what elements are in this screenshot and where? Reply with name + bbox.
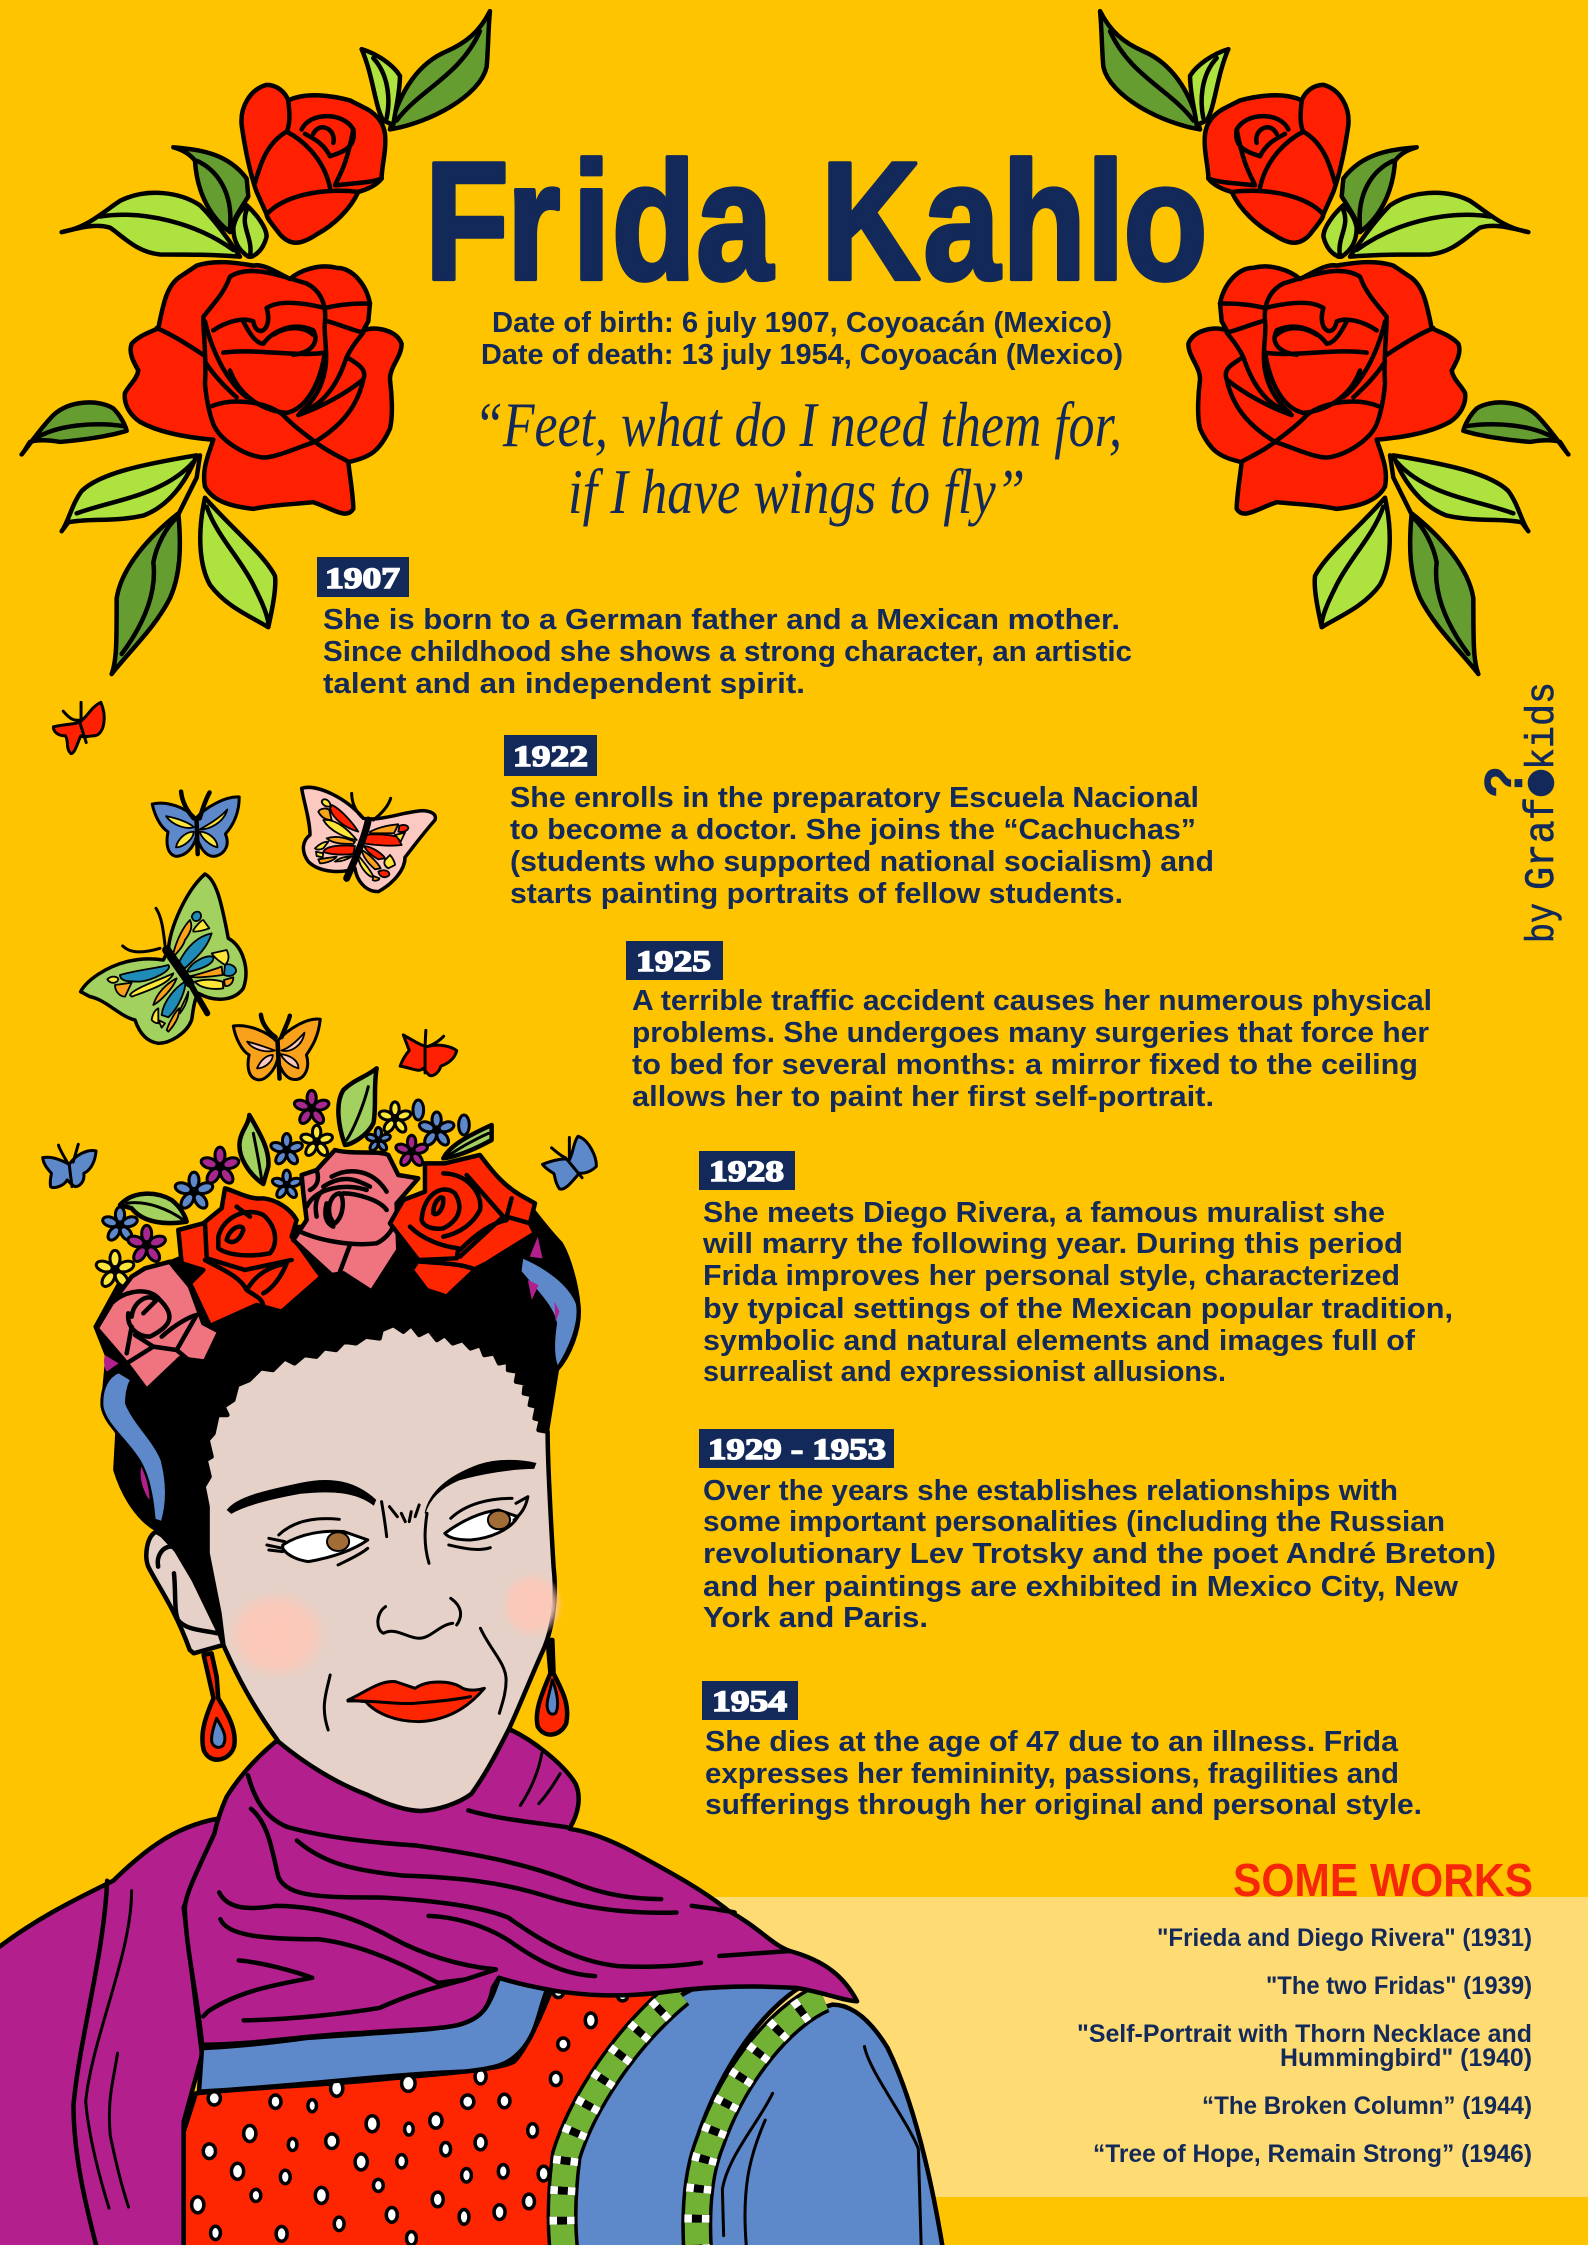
timeline: 1922: (students who supported national socialism) and — [510, 846, 1214, 878]
panel: some works background — [640, 1897, 1588, 2197]
timeline: 1928: 1928 — [709, 1155, 784, 1188]
timeline: 1925: problems. She undergoes many surgeries that force her — [632, 1017, 1429, 1049]
clothing — [0, 1730, 944, 2245]
timeline: 1907: She is born to a German father and a Mexican mother. — [323, 604, 1120, 636]
panel text: some works: "The two Fridas" (1939) — [1266, 1972, 1532, 2000]
blue sleeve — [698, 2005, 944, 2245]
timeline: 1925 — [626, 941, 1432, 1113]
blue collar — [199, 1978, 548, 2092]
timeline: 1929-1953: 1929 - 1953 — [708, 1433, 886, 1466]
small flowers — [95, 1090, 469, 1289]
dates: Date of death: 13 july 1954, Coyoacán (Mexico) — [481, 339, 1123, 371]
right eyebrow — [425, 1460, 536, 1513]
butterflies: small group — [43, 702, 596, 1189]
butterfly: blue — [152, 792, 239, 856]
rose: pink left — [97, 1262, 219, 1390]
right eye — [445, 1497, 528, 1549]
portrait of Frida — [0, 1068, 944, 2245]
quote: “Feet, what do I need them for, — [474, 389, 1122, 460]
timeline: 1925: A terrible traffic accident causes her numerous physical — [632, 985, 1432, 1017]
timeline: 1928: by typical settings of the Mexican popular tradition, — [703, 1293, 1453, 1325]
brow wrinkles and nose — [324, 1502, 506, 1730]
timeline: 1922: starts painting portraits of fellow students. — [510, 878, 1123, 910]
timeline: 1907: 1907 — [325, 562, 400, 595]
timeline: 1954: expresses her femininity, passions, fragilities and — [705, 1758, 1399, 1790]
timeline: 1928 — [699, 1151, 1453, 1388]
red blouse with dots — [184, 1988, 667, 2245]
magenta scarf — [185, 1730, 857, 2045]
butterfly: large green — [81, 874, 246, 1043]
small rose — [241, 85, 385, 243]
timeline: 1928: surrealist and expressionist allusions. — [703, 1356, 1226, 1388]
butterfly: pink — [302, 787, 435, 892]
panel text: some works: “Tree of Hope, Remain Strong” (1946) — [1093, 2140, 1532, 2168]
dates — [481, 307, 1123, 371]
timeline: 1922: to become a doctor. She joins the “Cachuchas” — [510, 814, 1196, 846]
left eyebrow — [227, 1480, 376, 1513]
timeline: 1929-1953: York and Paris. — [703, 1602, 928, 1634]
timeline: 1954: sufferings through her original and personal style. — [705, 1789, 1422, 1821]
timeline: 1929-1953: Over the years she establishes relationships with — [703, 1475, 1398, 1507]
quote: if I have wings to fly” — [568, 456, 1025, 527]
credit: by Grafokids: ? — [1474, 766, 1534, 798]
green braid: outer — [697, 1998, 823, 2245]
butterfly: small blue right — [542, 1136, 596, 1189]
timeline: 1907: Since childhood she shows a strong character, an artistic — [323, 636, 1132, 668]
credit: by Grafokids: kids — [1521, 682, 1566, 770]
leaf: long light — [62, 193, 267, 257]
leaf: upper left dark — [173, 147, 248, 232]
hair ribbon right — [520, 1237, 578, 1368]
leaf: bottom light — [200, 498, 275, 627]
timeline: 1929-1953: and her paintings are exhibited in Mexico City, New — [703, 1571, 1458, 1603]
hair ribbon left — [102, 1355, 167, 1523]
panel text: some works: "Self-Portrait with Thorn Necklace and — [1077, 2020, 1532, 2048]
leaf: bottom dark — [112, 455, 200, 674]
timeline: 1922: 1922 — [513, 740, 588, 773]
timeline: 1922 — [504, 735, 1214, 910]
timeline: 1907 — [317, 557, 1132, 700]
timeline: 1954 — [702, 1681, 1422, 1821]
timeline: 1929-1953 — [699, 1429, 1496, 1634]
leaf: lower left dark — [22, 402, 127, 454]
timeline: 1922: She enrolls in the preparatory Escuela Nacional — [510, 782, 1199, 814]
butterfly: red top left — [53, 702, 104, 754]
timeline: 1929-1953: revolutionary Lev Trotsky and the poet André Breton) — [703, 1538, 1496, 1570]
credit: by Grafokids — [1474, 682, 1566, 943]
earring right — [537, 1640, 567, 1735]
title: Frida Kahlo — [425, 127, 1208, 315]
panel text: some works — [1077, 1854, 1533, 2168]
timeline: 1928: symbolic and natural elements and images full of — [703, 1325, 1415, 1357]
timeline: 1928: Frida improves her personal style, characterized — [703, 1260, 1400, 1292]
panel text: some works: "Frieda and Diego Rivera" (1931) — [1157, 1924, 1532, 1952]
panel text: some works: “The Broken Column” (1944) — [1202, 2092, 1532, 2120]
large rose — [125, 262, 402, 514]
leaf: lower left light — [62, 455, 197, 531]
lips — [348, 1681, 484, 1722]
timeline: 1954: 1954 — [712, 1685, 787, 1718]
timeline: 1925: 1925 — [636, 945, 711, 978]
timeline: 1925: allows her to paint her first self-portrait. — [632, 1081, 1214, 1113]
rose: red right — [390, 1155, 535, 1297]
butterfly: red right — [400, 1030, 457, 1076]
ear — [146, 1532, 223, 1653]
dates: Date of birth: 6 july 1907, Coyoacán (Mexico) — [492, 307, 1112, 339]
rose: red left — [178, 1188, 322, 1326]
butterfly: small blue left — [43, 1144, 96, 1188]
crown leaves — [120, 1068, 492, 1223]
butterfly: orange — [233, 1015, 320, 1080]
timeline: 1929-1953: some important personalities (including the Russian — [703, 1506, 1445, 1538]
timeline: 1928: will marry the following year. During this period — [702, 1228, 1403, 1260]
left eye — [267, 1519, 368, 1565]
timeline: 1954: She dies at the age of 47 due to an illness. Frida — [705, 1726, 1399, 1758]
head — [95, 1200, 579, 1811]
flower crown — [95, 1068, 535, 1390]
leaf: top dark — [362, 11, 490, 129]
cheek blush — [225, 1572, 563, 1680]
roses: top right bouquet — [1100, 11, 1568, 674]
green braid: inner — [562, 1993, 680, 2245]
timeline: 1907: talent and an independent spirit. — [323, 668, 805, 700]
timeline: 1928: She meets Diego Rivera, a famous muralist she — [703, 1197, 1385, 1229]
quote — [474, 389, 1122, 527]
face — [204, 1325, 555, 1811]
blue cardigan front — [566, 1986, 799, 2245]
credit: by Grafokids: by — [1521, 903, 1566, 943]
timeline: 1925: to bed for several months: a mirror fixed to the ceiling — [632, 1049, 1418, 1081]
hair — [95, 1200, 579, 1633]
panel text: some works: SOME WORKS — [1233, 1854, 1533, 1906]
panel text: some works: Hummingbird" (1940) — [1280, 2044, 1532, 2072]
rose: pink center — [293, 1150, 418, 1292]
credit: by Grafokids: Graf — [1518, 797, 1566, 890]
earring left — [202, 1653, 235, 1760]
roses: top left bouquet — [22, 11, 490, 674]
shawl left side — [0, 1819, 220, 2245]
